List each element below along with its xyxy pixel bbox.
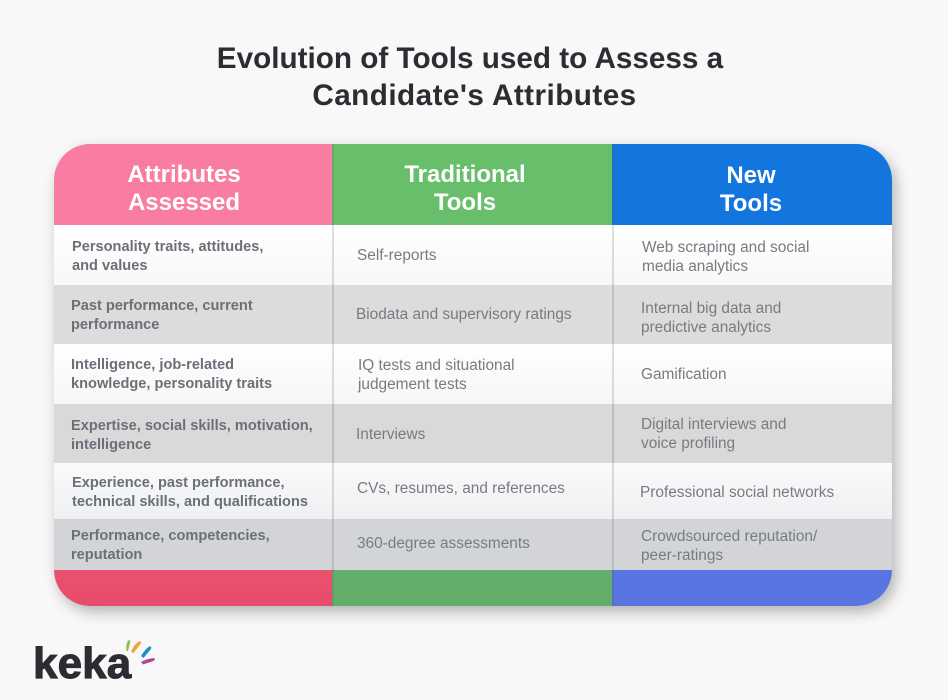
- title: Candidate's Attributes: [312, 79, 637, 112]
- traditional tool 3: judgement tests: [358, 376, 467, 393]
- new tool 4: voice profiling: [641, 435, 735, 452]
- attribute 4: [71, 418, 313, 453]
- attribute 2: performance: [71, 317, 159, 333]
- row band 1: [54, 225, 892, 285]
- row band 6: [54, 519, 892, 570]
- traditional tool 6: 360-degree assessments: [357, 535, 530, 552]
- panel: header pink: [54, 144, 332, 225]
- row band 5: [54, 463, 892, 519]
- new tool 1: media analytics: [642, 258, 748, 275]
- panel: header green: [332, 144, 612, 225]
- row band 4: [54, 404, 892, 463]
- traditional tool 2: Biodata and supervisory ratings: [356, 306, 572, 323]
- new tool 5: Professional social networks: [640, 484, 834, 501]
- heading: traditional tools: Tools: [434, 189, 496, 216]
- traditional tool 1: Self-reports: [357, 247, 437, 264]
- new tool 3: Gamification: [641, 366, 727, 383]
- heading: attributes assessed: Assessed: [128, 189, 240, 216]
- table: [54, 144, 892, 606]
- new tool 1: [642, 239, 809, 275]
- footer pink: [54, 570, 332, 606]
- title: Evolution of Tools used to Assess a: [217, 42, 723, 75]
- heading: new tools: New: [726, 162, 776, 189]
- new tool 2: predictive analytics: [641, 319, 771, 336]
- attribute 1: Personality traits, attitudes,: [72, 239, 263, 255]
- heading: traditional tools: [404, 161, 526, 216]
- attribute 2: [71, 298, 253, 333]
- footer blue: [612, 570, 892, 606]
- row band 2: [54, 285, 892, 344]
- attribute 1: and values: [72, 258, 147, 274]
- new tool 2: [641, 300, 781, 336]
- attribute 6: Performance, competencies,: [71, 528, 270, 544]
- attribute 3: Intelligence, job-related: [71, 357, 234, 373]
- new tool 6: peer-ratings: [641, 547, 723, 564]
- attribute 5: technical skills, and qualifications: [72, 494, 308, 510]
- logo wordmark: keka: [33, 639, 131, 688]
- attribute 2: Past performance, current: [71, 298, 253, 314]
- heading: attributes assessed: [127, 161, 241, 216]
- new tool 6: Crowdsourced reputation/: [641, 528, 817, 545]
- traditional tool 3: [358, 357, 515, 393]
- attribute 5: Experience, past performance,: [72, 475, 285, 491]
- logo: keka: [33, 639, 155, 688]
- icon: colored rays: [126, 640, 155, 664]
- heading: traditional tools: Traditional: [404, 161, 526, 188]
- attribute 6: reputation: [71, 547, 142, 563]
- new tool 1: Web scraping and social: [642, 239, 809, 256]
- attribute 6: [71, 528, 270, 563]
- new tool 2: Internal big data and: [641, 300, 781, 317]
- traditional tool 3: IQ tests and situational: [358, 357, 515, 374]
- row band 3: [54, 344, 892, 404]
- attribute 3: [71, 357, 272, 392]
- heading: new tools: [720, 162, 782, 217]
- traditional tool 4: Interviews: [356, 426, 425, 443]
- footer green: [332, 570, 612, 606]
- new tool 4: Digital interviews and: [641, 416, 786, 433]
- attribute 1: [72, 239, 263, 274]
- heading: attributes assessed: Attributes: [127, 161, 241, 188]
- new tool 6: [641, 528, 818, 564]
- attribute 5: [72, 475, 308, 510]
- attribute 3: knowledge, personality traits: [71, 376, 272, 392]
- attribute 4: Expertise, social skills, motivation,: [71, 418, 313, 434]
- panel: header blue: [612, 144, 892, 225]
- attribute 4: intelligence: [71, 437, 151, 453]
- new tool 4: [641, 416, 786, 452]
- heading: new tools: Tools: [720, 190, 782, 217]
- title: [217, 42, 724, 112]
- traditional tool 5: CVs, resumes, and references: [357, 480, 565, 497]
- column divider 1: [332, 144, 334, 606]
- column divider 2: [612, 144, 614, 606]
